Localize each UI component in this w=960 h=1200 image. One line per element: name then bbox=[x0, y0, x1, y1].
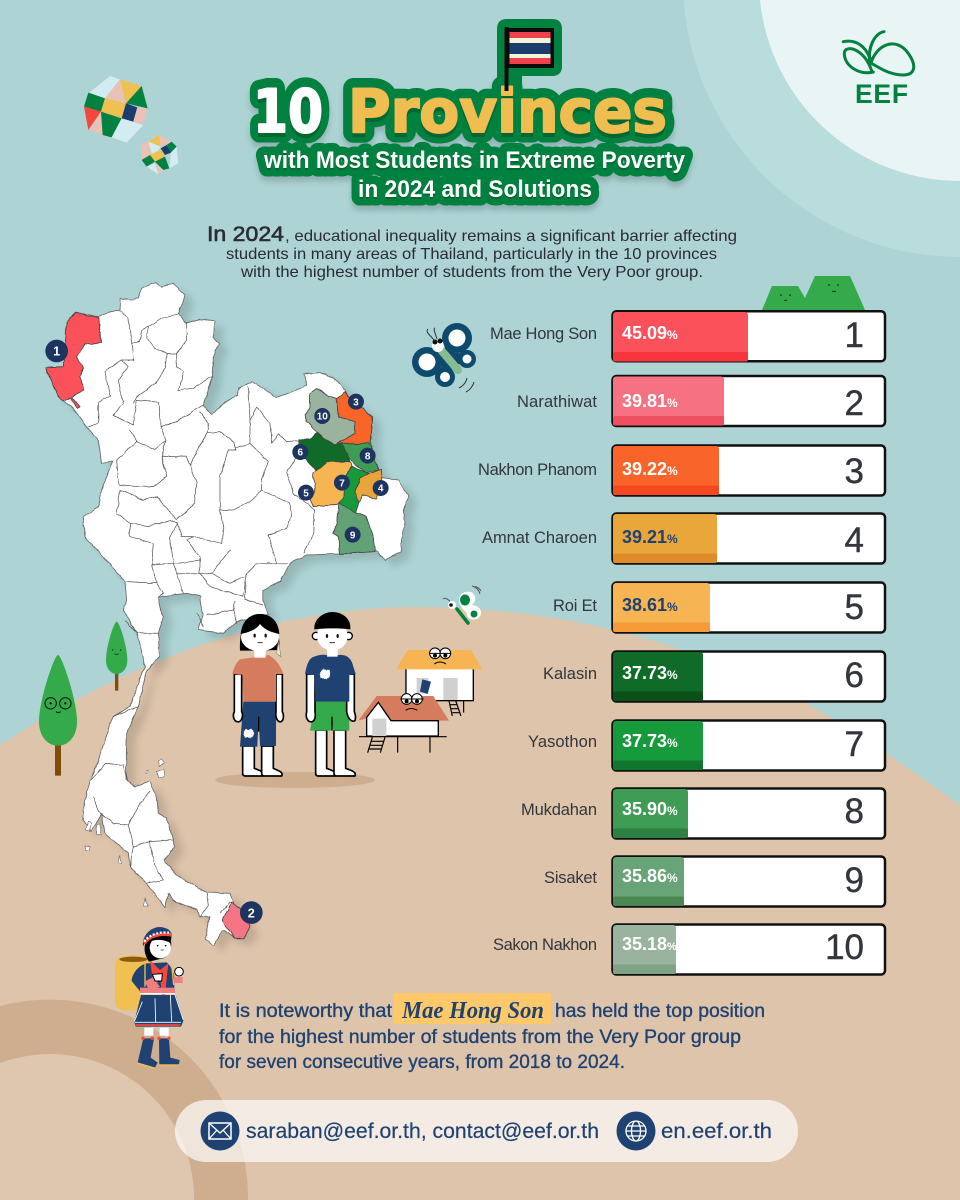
note text: for seven consecutive years, from 2018 to 2024. bbox=[219, 1052, 625, 1073]
icon: big tree bbox=[39, 655, 77, 776]
island details bbox=[85, 759, 165, 907]
map of Thailand bbox=[45, 283, 417, 952]
row 10: Sakon Nakhon bbox=[493, 924, 885, 974]
highlight: Mae Hong Son: Mae Hong Son bbox=[401, 998, 544, 1024]
icon: Thai flag bbox=[497, 19, 562, 90]
map number badges: 1 bbox=[53, 345, 60, 359]
row 2: Narathiwat: 39.81% bbox=[622, 391, 678, 411]
row 1: Mae Hong Son: 45.09% bbox=[622, 323, 678, 343]
contact pill bbox=[175, 1100, 798, 1162]
row 9: Sisaket: 35.86% bbox=[622, 866, 678, 886]
map number badges: 2 bbox=[248, 906, 255, 920]
heading: 10 Provinces: 10 bbox=[253, 81, 323, 151]
province: Yasothon bbox=[338, 467, 370, 513]
row 4: Amnat Charoen: 39.21% bbox=[622, 527, 678, 547]
province: Nakhon Phanom bbox=[335, 392, 373, 445]
contact pill: saraban@eef.or.th, contact@eef.or.th bbox=[246, 1119, 599, 1143]
row 2: Narathiwat bbox=[517, 376, 885, 426]
province: Mukdahan bbox=[342, 443, 378, 473]
row 8: Mukdahan: 8 bbox=[845, 792, 864, 831]
icon: globe bbox=[616, 1112, 656, 1150]
character: girl bbox=[232, 614, 283, 776]
row 4: Amnat Charoen: Amnat Charoen bbox=[482, 529, 597, 547]
icon: back house bbox=[396, 648, 482, 716]
heading: 10 Provinces: 10 bbox=[253, 77, 323, 147]
row 9: Sisaket: Sisaket bbox=[544, 869, 597, 887]
icon: small kite bbox=[141, 135, 178, 174]
note text bbox=[219, 993, 765, 1073]
row 7: Yasothon: 7 bbox=[845, 725, 864, 764]
intro text: with the highest number of students from the Very Poor group. bbox=[240, 264, 703, 281]
row 6: Kalasin: 6 bbox=[845, 656, 864, 695]
character: hill tribe woman bbox=[115, 927, 184, 1068]
ground shadow bbox=[215, 772, 375, 788]
map number badges bbox=[45, 340, 389, 924]
row 9: Sisaket bbox=[544, 856, 885, 906]
contact pill: en.eef.or.th bbox=[661, 1119, 772, 1143]
subtitle: in 2024 and Solutions bbox=[358, 178, 592, 205]
note text: It is noteworthy that bbox=[219, 1001, 393, 1022]
heading: 10 Provinces: Provinces bbox=[348, 77, 667, 147]
map number badges: 5 bbox=[303, 488, 309, 499]
title bbox=[253, 19, 686, 205]
row 8: Mukdahan: 35.90% bbox=[622, 799, 678, 819]
row 1: Mae Hong Son: Mae Hong Son bbox=[490, 325, 597, 343]
row 4: Amnat Charoen bbox=[482, 514, 885, 564]
row 5: Roi Et bbox=[553, 582, 885, 632]
heading: 10 Provinces: 10 bbox=[253, 77, 323, 147]
province: Roi Et bbox=[310, 462, 352, 507]
icon: front house bbox=[358, 694, 449, 753]
row 7: Yasothon: 37.73% bbox=[622, 731, 678, 751]
subtitle: with Most Students in Extreme Poverty bbox=[263, 149, 686, 176]
row 1: Mae Hong Son: 1 bbox=[845, 316, 864, 355]
intro text bbox=[207, 222, 737, 281]
row 5: Roi Et: 5 bbox=[845, 588, 864, 627]
map number badges: 10 bbox=[317, 412, 328, 423]
character: boy bbox=[305, 612, 356, 776]
icon: large kite bbox=[84, 76, 148, 143]
row 3: Nakhon Phanom bbox=[478, 446, 885, 496]
map number badges: 6 bbox=[298, 448, 304, 459]
icon: blue butterfly bbox=[412, 323, 476, 392]
map number badges: 8 bbox=[365, 451, 371, 462]
row 9: Sisaket: 9 bbox=[845, 861, 864, 900]
icon: EEF logo: EEF bbox=[855, 79, 908, 109]
row 5: Roi Et: Roi Et bbox=[553, 597, 597, 615]
row 7: Yasothon: Yasothon bbox=[528, 733, 597, 751]
heading: 10 Provinces: Provinces bbox=[348, 77, 667, 147]
intro text: In 2024 bbox=[207, 222, 284, 246]
subtitle: in 2024 and Solutions bbox=[358, 176, 592, 203]
icon: EEF logo bbox=[843, 32, 914, 109]
subtitle: with Most Students in Extreme Poverty bbox=[263, 147, 686, 174]
row 10: Sakon Nakhon: 35.18% bbox=[622, 934, 677, 954]
icon: small tree bbox=[106, 622, 127, 691]
icon: white butterfly bbox=[443, 586, 481, 623]
note text: has held the top position bbox=[555, 1001, 765, 1022]
row 3: Nakhon Phanom: Nakhon Phanom bbox=[478, 461, 597, 479]
map number badges: 3 bbox=[353, 397, 359, 408]
row 10: Sakon Nakhon: 10 bbox=[825, 928, 864, 967]
intro text: students in many areas of Thailand, particularly in the 10 provinces bbox=[226, 246, 717, 263]
intro text: , educational inequality remains a significant barrier affecting bbox=[285, 228, 737, 245]
icon: envelope bbox=[200, 1112, 240, 1150]
province: Kalasin bbox=[298, 433, 350, 472]
map number badges: 9 bbox=[350, 530, 356, 541]
row 5: Roi Et: 38.61% bbox=[622, 595, 678, 615]
map number badges: 4 bbox=[378, 484, 384, 495]
heading: 10 Provinces: Provinces bbox=[348, 81, 667, 151]
map number badges: 7 bbox=[339, 478, 345, 489]
row 2: Narathiwat: 2 bbox=[845, 384, 864, 423]
row 1: Mae Hong Son bbox=[490, 311, 885, 362]
row 6: Kalasin: 37.73% bbox=[622, 663, 678, 683]
subtitle: with Most Students in Extreme Poverty bbox=[263, 147, 686, 174]
subtitle bbox=[263, 147, 686, 205]
bar chart bbox=[478, 311, 885, 974]
row 8: Mukdahan: Mukdahan bbox=[521, 801, 597, 819]
province: Mae Hong Son bbox=[46, 312, 102, 408]
row 2: Narathiwat: Narathiwat bbox=[517, 393, 597, 411]
row 8: Mukdahan bbox=[521, 788, 885, 838]
province: Sisaket bbox=[333, 503, 375, 554]
row 6: Kalasin: Kalasin bbox=[543, 665, 597, 683]
province: Narathiwat bbox=[223, 903, 250, 938]
row 3: Nakhon Phanom: 3 bbox=[845, 452, 864, 491]
subtitle: in 2024 and Solutions bbox=[358, 176, 592, 203]
note text: for the highest number of students from the Very Poor group bbox=[219, 1027, 741, 1048]
row 7: Yasothon bbox=[528, 720, 885, 770]
icon: green hills bbox=[762, 276, 865, 310]
row 4: Amnat Charoen: 4 bbox=[845, 521, 864, 560]
province: Sakon Nakhon bbox=[305, 388, 355, 445]
row 10: Sakon Nakhon: Sakon Nakhon bbox=[493, 936, 597, 954]
row 6: Kalasin bbox=[543, 652, 885, 702]
row 3: Nakhon Phanom: 39.22% bbox=[622, 459, 678, 479]
province: Amnat Charoen bbox=[355, 469, 382, 502]
